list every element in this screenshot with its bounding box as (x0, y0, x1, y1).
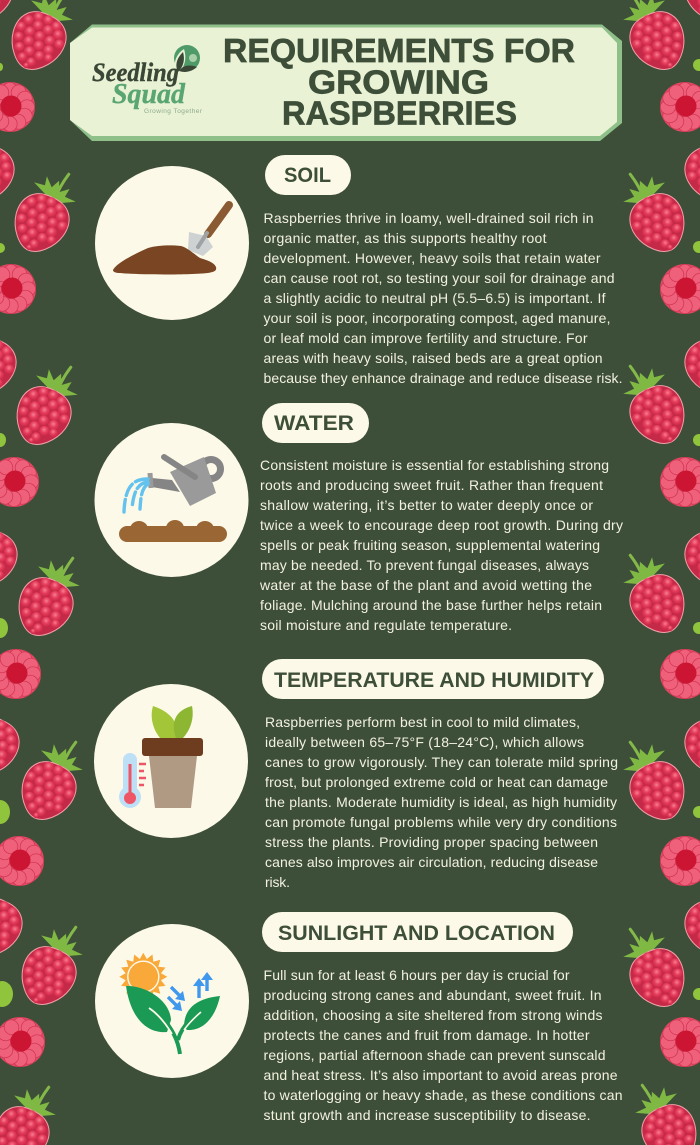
text: water: spells or peak fruiting season, supplemental watering (260, 537, 600, 553)
heading: soil (265, 155, 351, 195)
text: water: water at the base of the plant and avoid wetting the (259, 577, 592, 593)
heading: sunlight and location: SUNLIGHT AND LOCATION (278, 922, 555, 945)
text: soil: because they enhance drainage and reduce disease risk. (264, 370, 622, 386)
text: water: may be needed. To prevent fungal diseases, always (260, 557, 589, 573)
text: soil: Raspberries thrive in loamy, well-drained soil rich in (264, 210, 594, 226)
logo: Growing Together (144, 108, 203, 115)
heading: temperature and humidity: TEMPERATURE AND HUMIDITY (274, 669, 594, 692)
text: water: foliage. Mulching around the base further helps retain (260, 597, 602, 613)
panel: temperature and humidity (94, 659, 618, 890)
text: soil (264, 210, 622, 386)
text: water: twice a week to encourage deep root growth. During dry (260, 517, 623, 533)
text: temperature and humidity: can promote fungal problems while very dry conditions (265, 814, 617, 830)
text: soil: areas with heavy soils, raised beds are a great option (264, 350, 602, 366)
text: sunlight and location: protects the canes and fruit from damage. In hotter (264, 1027, 590, 1043)
text: water: Consistent moisture is essential for establishing strong (260, 457, 609, 473)
text: soil: development. However, heavy soils that retain water (264, 250, 601, 266)
header banner (70, 24, 622, 141)
title (223, 32, 575, 132)
title: GROWING (308, 64, 489, 100)
text: sunlight and location: to waterlogging or heavy shade, as these conditions can (264, 1087, 622, 1103)
text: sunlight and location: addition, choosing a site sheltered from strong winds (264, 1007, 602, 1023)
text: sunlight and location: and heat stress. It’s also important to avoid areas prone (264, 1067, 618, 1083)
text: water (259, 457, 623, 633)
heading: temperature and humidity (262, 659, 604, 699)
text: water: roots and producing sweet fruit. Rather than frequent (260, 477, 603, 493)
heading: water: WATER (274, 412, 354, 435)
heading: water (262, 403, 369, 443)
text: temperature and humidity: canes to grow vigorously. They can tolerate mild spring (265, 754, 618, 770)
title: RASPBERRIES (282, 94, 517, 132)
text: temperature and humidity: stress the plants. Providing proper spacing between (265, 834, 598, 850)
icon: sun and leaves (95, 924, 249, 1078)
text: temperature and humidity: risk. (265, 874, 290, 890)
logo: Squad (112, 79, 186, 110)
text: soil: or leaf mold can improve fertility and structure. For (264, 330, 588, 346)
text: sunlight and location: stunt growth and increase susceptibility to disease. (264, 1107, 590, 1123)
text: temperature and humidity: frost, but prolonged extreme cold or heat can damage (265, 774, 608, 790)
text: sunlight and location (264, 967, 622, 1123)
title: REQUIREMENTS FOR (223, 32, 575, 69)
logo (92, 45, 203, 115)
text: temperature and humidity: ideally between 65–75°F (18–24°C), which allows (265, 734, 584, 750)
text: water: shallow watering, it’s better to water deeply once or (260, 497, 593, 513)
heading: soil: SOIL (284, 164, 331, 187)
icon: watering can (94, 423, 248, 577)
raspberry border: left (0, 0, 95, 1145)
icon: potted plant and thermometer (94, 684, 248, 838)
text: temperature and humidity: canes also improves air circulation, reducing disease (265, 854, 598, 870)
heading: sunlight and location (262, 912, 573, 952)
panel: sunlight and location (95, 912, 622, 1123)
raspberry border: right (611, 0, 700, 1145)
logo: Seedling (92, 58, 179, 87)
text: sunlight and location: regions, partial afternoon shade can prevent sunscald (264, 1047, 606, 1063)
text: temperature and humidity (265, 714, 618, 890)
text: soil: your soil is poor, incorporating compost, aged manure, (264, 310, 610, 326)
text: soil: can cause root rot, so testing your soil for drainage and (264, 270, 614, 286)
panel: soil (95, 155, 622, 386)
icon: soil and shovel (95, 166, 249, 320)
text: temperature and humidity: the plants. Moderate humidity is ideal, as high humidity (265, 794, 617, 810)
text: sunlight and location: Full sun for at least 6 hours per day is crucial for (264, 967, 570, 983)
text: sunlight and location: producing strong canes and abundant, sweet fruit. In (264, 987, 602, 1003)
text: soil: a slightly acidic to neutral pH (5.5–6.5) is important. If (264, 290, 606, 306)
text: soil: organic matter, as this supports healthy root (264, 230, 547, 246)
text: temperature and humidity: Raspberries perform best in cool to mild climates, (265, 714, 580, 730)
panel: water (94, 403, 623, 633)
text: water: soil moisture and regulate temperature. (260, 617, 512, 633)
